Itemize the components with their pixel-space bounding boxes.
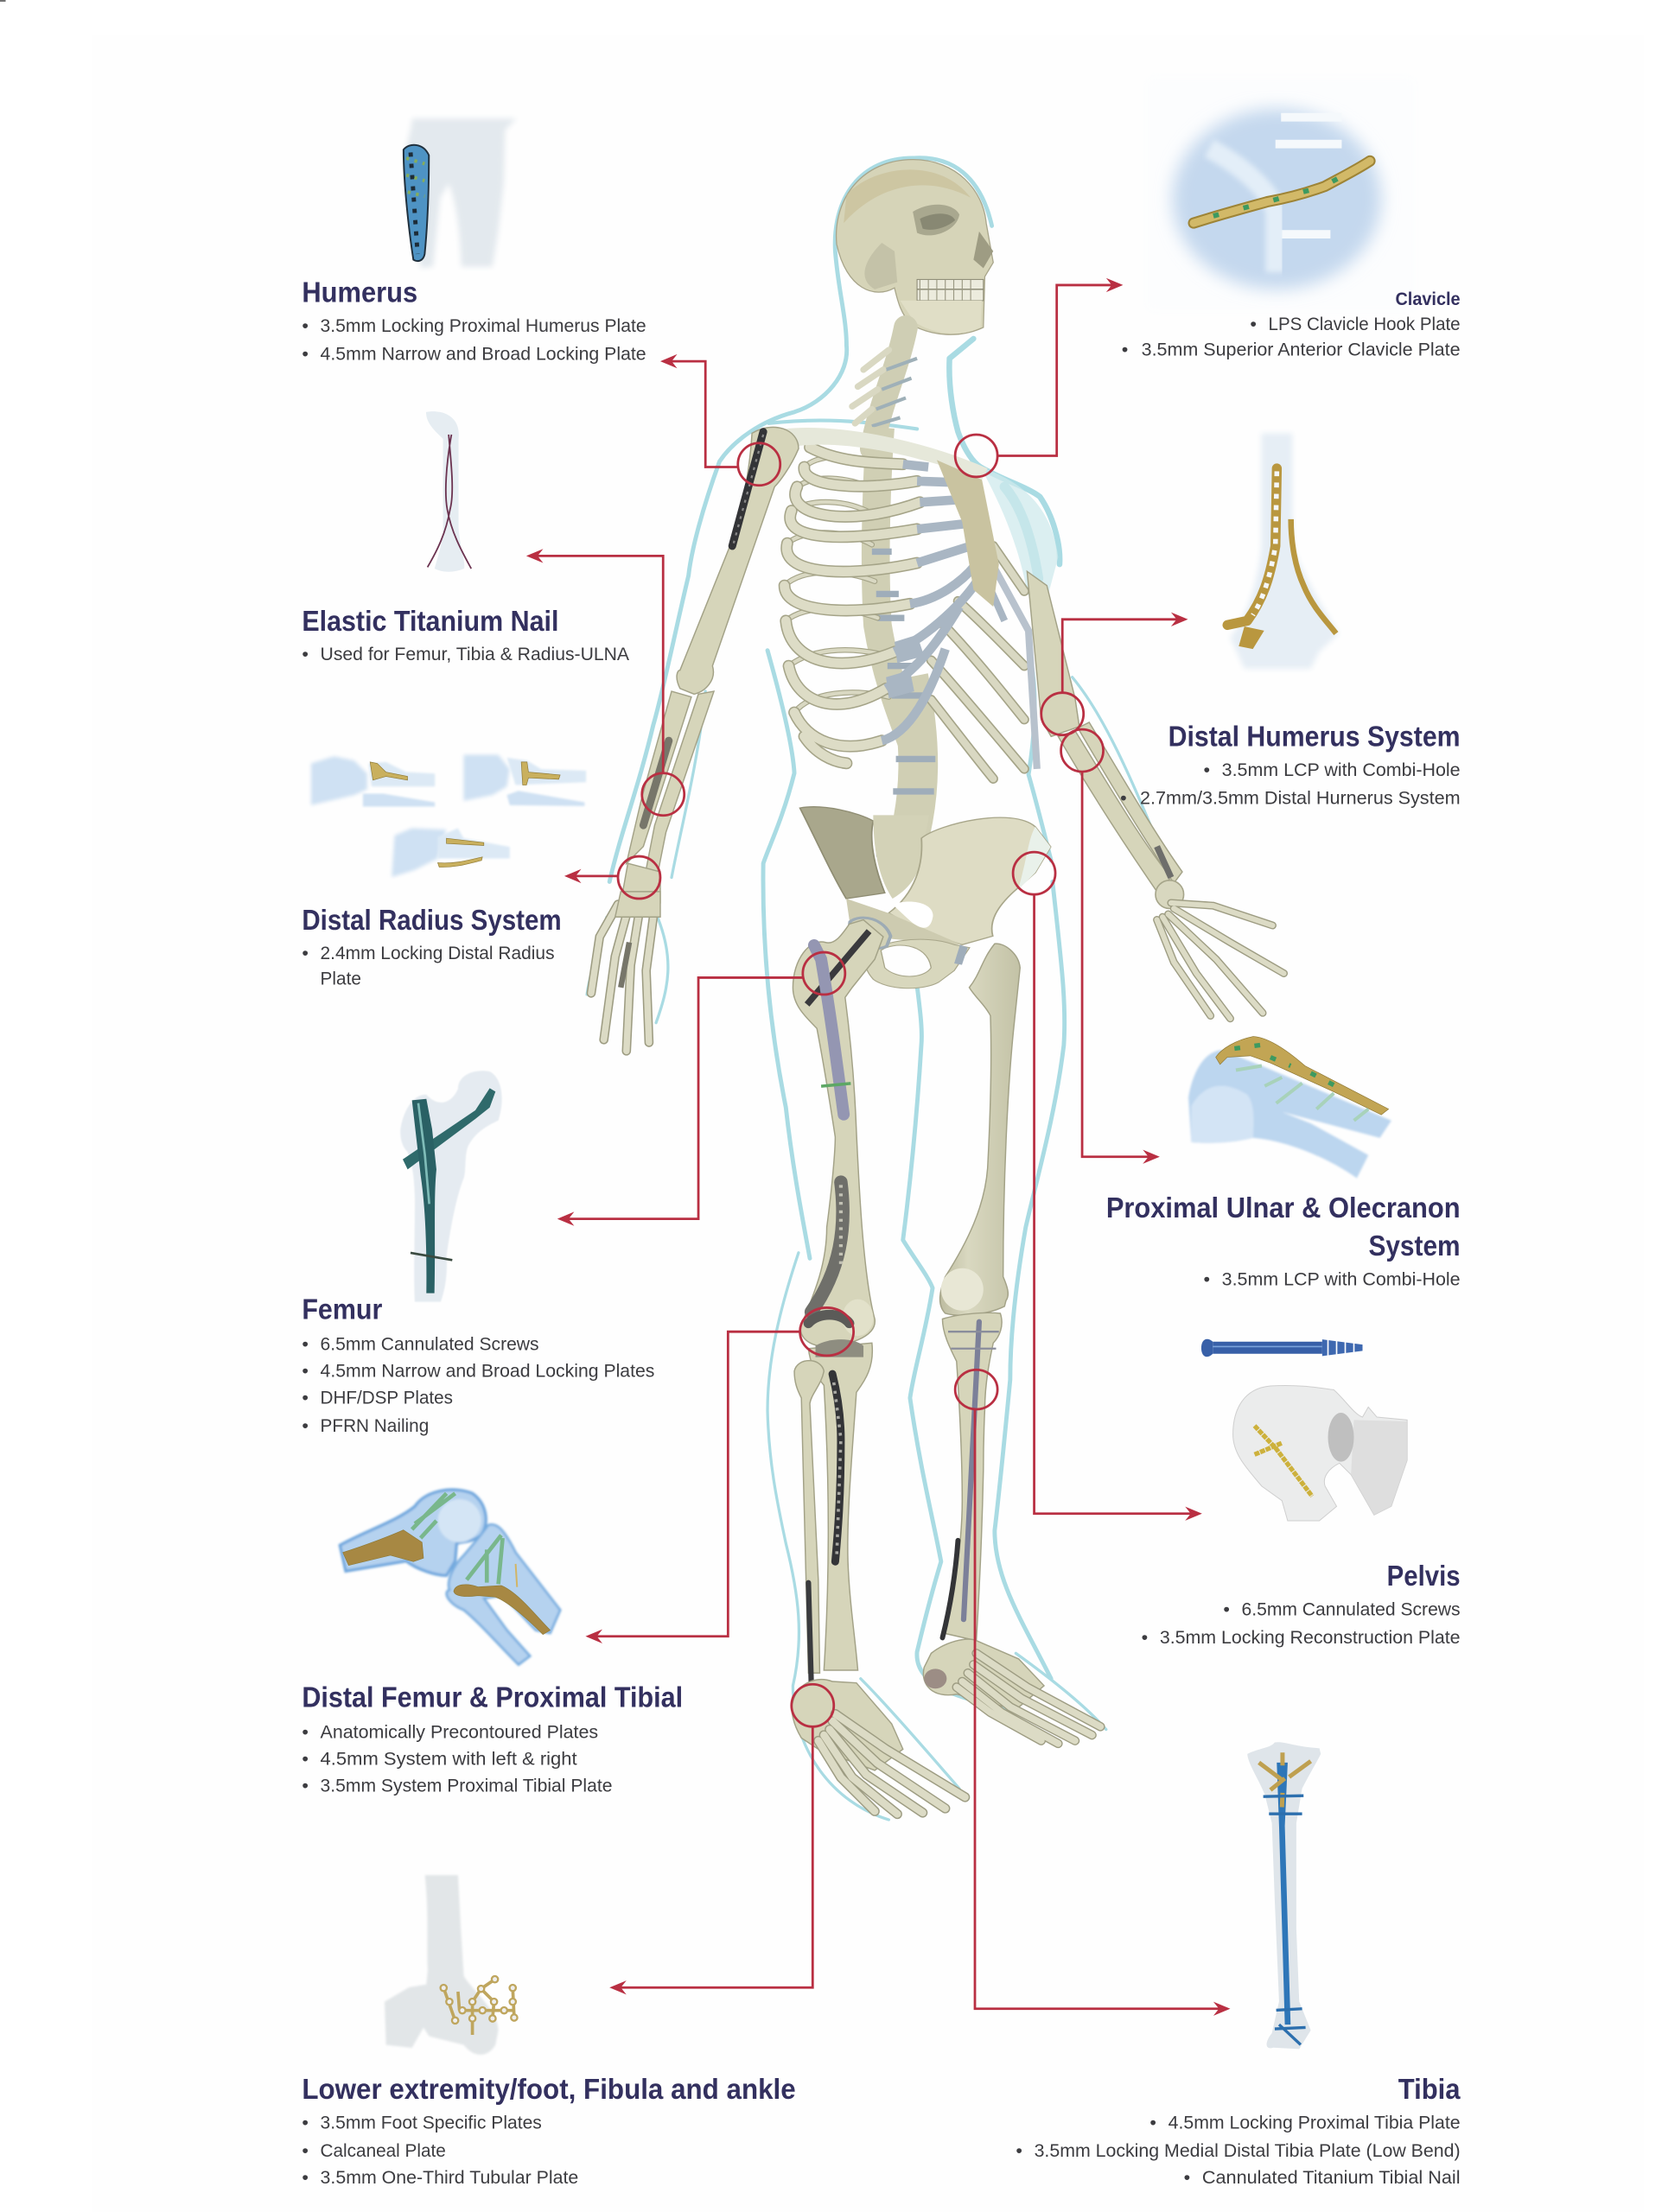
text block: Tibia: • (1184, 2167, 1190, 2188)
text block: Femur (302, 1294, 654, 1436)
image: femur nail (400, 1071, 502, 1302)
skull and jaw (837, 160, 993, 334)
text block: Humerus: 4.5mm Narrow and Broad Locking Plate (321, 343, 646, 364)
image: proximal ulnar plate (1188, 1037, 1391, 1178)
text block: Pelvis: • (1142, 1627, 1148, 1648)
image: humerus plate (404, 118, 516, 268)
text block: Distal Femur and Proximal Tibial: Distal Femur & Proximal Tibial (302, 1681, 683, 1713)
text block: Femur: • (302, 1360, 309, 1381)
image: distal humerus plate (1227, 433, 1339, 669)
image: distal femur and proximal tibia (340, 1490, 560, 1665)
text block: Distal Radius System: Plate (321, 969, 361, 989)
pelvis and hips (800, 807, 1051, 988)
text block: Elastic Titanium Nail: • (302, 644, 309, 664)
cervical spine (852, 327, 917, 448)
text block: Tibia (1016, 2074, 1461, 2188)
text block: Femur: • (302, 1415, 309, 1436)
viewer-left arm (621, 427, 799, 903)
text block: Tibia: 3.5mm Locking Medial Distal Tibia Plate (Low Bend) (1035, 2140, 1461, 2161)
text block: Distal Humerus System: 2.7mm/3.5mm Distal Hurnerus System (1140, 788, 1461, 809)
text block: Clavicle: • (1250, 314, 1257, 334)
image: clavicle plate (1147, 78, 1415, 310)
text block: Proximal Ulnar and Olecranon: • (1203, 1268, 1210, 1289)
text block: Tibia: • (1149, 2113, 1156, 2133)
text block: Distal Radius System: Distal Radius System (302, 905, 562, 937)
connector: elastic titanium nail (526, 549, 685, 816)
text block: Femur: Femur (302, 1294, 382, 1325)
text block: Distal Humerus System: Distal Humerus System (1168, 721, 1461, 753)
skin contour lines (587, 158, 1165, 1820)
viewer-right ribs (931, 546, 1037, 779)
text block: Humerus: Humerus (302, 277, 417, 309)
text block: Femur: 4.5mm Narrow and Broad Locking Plates (321, 1360, 654, 1381)
text block: Proximal Ulnar and Olecranon: Proximal Ulnar & Olecranon (1106, 1192, 1461, 1224)
image: ankle plate (385, 1875, 518, 2055)
text block: Humerus: • (302, 343, 309, 364)
text block: Elastic Titanium Nail: Used for Femur, Tibia & Radius-ULNA (321, 644, 630, 664)
viewer-left hand (591, 892, 660, 1051)
text block: Distal Radius System (302, 905, 562, 989)
text block: Distal Femur and Proximal Tibial: Anatomically Precontoured Plates (321, 1721, 598, 1742)
text block: Femur: • (302, 1387, 309, 1408)
text block: Proximal Ulnar and Olecranon: 3.5mm LCP with Combi-Hole (1222, 1268, 1461, 1289)
text block: Distal Femur and Proximal Tibial: • (302, 1775, 309, 1796)
text block: Proximal Ulnar and Olecranon: System (1368, 1230, 1461, 1262)
text block: Distal Femur and Proximal Tibial: • (302, 1748, 309, 1769)
text block: Femur: DHF/DSP Plates (321, 1387, 453, 1408)
text block: Distal Humerus System: • (1120, 788, 1127, 809)
text block: Clavicle (1122, 289, 1461, 360)
text block: Pelvis: 6.5mm Cannulated Screws (1242, 1599, 1461, 1619)
text block: Distal Humerus System: 3.5mm LCP with Combi-Hole (1222, 760, 1461, 780)
text block: Lower extremity: Calcaneal Plate (321, 2140, 446, 2161)
text block: Lower extremity (302, 2074, 796, 2188)
connector: foot (609, 1684, 834, 1994)
viewer-left femur with nail (793, 920, 883, 1346)
image: distal radius plates (311, 755, 586, 877)
text block: Lower extremity: 3.5mm One-Third Tubular Plate (321, 2167, 578, 2188)
text block: Clavicle: Clavicle (1395, 289, 1461, 309)
text block: Distal Humerus System (1120, 721, 1461, 809)
text block: Tibia: 4.5mm Locking Proximal Tibia Plate (1168, 2113, 1461, 2133)
connector: femur (557, 952, 845, 1226)
text block: Distal Femur and Proximal Tibial: • (302, 1721, 309, 1742)
viewer-left lower leg with plates (794, 1339, 872, 1683)
skeleton figure (587, 158, 1284, 1820)
connector: distal radius (564, 856, 660, 899)
text block: Humerus: 3.5mm Locking Proximal Humerus Plate (321, 315, 646, 336)
viewer-left foot (792, 1680, 965, 1814)
viewer-right lower leg with nail (942, 1313, 1002, 1641)
text block: Lower extremity: 3.5mm Foot Specific Plates (321, 2113, 542, 2133)
arm implants (621, 432, 1171, 988)
viewer-right foot (923, 1639, 1100, 1744)
text block: Humerus (302, 277, 646, 364)
text block: Femur: • (302, 1333, 309, 1354)
text block: Clavicle: • (1122, 340, 1128, 360)
spine (869, 428, 935, 868)
connector: humerus (660, 354, 780, 486)
connector: clavicle (955, 278, 1123, 477)
text block: Femur: PFRN Nailing (321, 1415, 429, 1436)
text block: Tibia: Tibia (1398, 2074, 1461, 2106)
text block: Distal Radius System: 2.4mm Locking Distal Radius (321, 943, 555, 963)
viewer-right arm (1027, 571, 1184, 908)
text block: Lower extremity: • (302, 2167, 309, 2188)
text block: Pelvis: • (1223, 1599, 1230, 1619)
text block: Elastic Titanium Nail (302, 606, 630, 664)
text block: Proximal Ulnar and Olecranon (1106, 1192, 1461, 1289)
text block: Tibia: • (1016, 2140, 1022, 2161)
text block: Clavicle: 3.5mm Superior Anterior Clavicle Plate (1142, 340, 1461, 360)
connector: proximal ulnar (1061, 729, 1160, 1164)
text block: Elastic Titanium Nail: Elastic Titanium Nail (302, 606, 558, 638)
connector: distal femur (585, 1307, 854, 1643)
connector: tibia (955, 1370, 1230, 2016)
text block: Distal Femur and Proximal Tibial: 4.5mm System with left & right (321, 1748, 577, 1769)
text block: Distal Femur and Proximal Tibial: 3.5mm System Proximal Tibial Plate (321, 1775, 612, 1796)
text block: Lower extremity: • (302, 2140, 309, 2161)
viewer-right hand (1157, 903, 1284, 1019)
text block: Pelvis: 3.5mm Locking Reconstruction Plate (1160, 1627, 1461, 1648)
text block: Clavicle: LPS Clavicle Hook Plate (1269, 314, 1461, 334)
text block: Lower extremity: • (302, 2113, 309, 2133)
image: cannulated screw and pelvis (1201, 1339, 1407, 1521)
text block: Humerus: • (302, 315, 309, 336)
rib cartilage (882, 464, 981, 741)
connector: distal humerus (1041, 613, 1188, 735)
text block: Distal Humerus System: • (1203, 760, 1210, 780)
text block: Distal Femur and Proximal Tibial (302, 1681, 683, 1796)
clavicle and sternum (785, 428, 999, 607)
viewer-right femur (940, 944, 1020, 1315)
text block: Lower extremity: Lower extremity/foot, Fibula and ankle (302, 2074, 796, 2106)
text block: Femur: 6.5mm Cannulated Screws (321, 1333, 539, 1354)
viewer-left ribs (785, 448, 920, 763)
text block: Distal Radius System: • (302, 943, 309, 963)
text block: Pelvis: Pelvis (1387, 1560, 1461, 1592)
image: elastic nail (426, 411, 471, 572)
text block: Tibia: Cannulated Titanium Tibial Nail (1202, 2167, 1461, 2188)
connector: pelvis (1013, 852, 1202, 1521)
image: tibial nail (1247, 1742, 1321, 2049)
text block: Pelvis (1142, 1560, 1461, 1648)
shoulder translucent tissue (981, 467, 1058, 620)
